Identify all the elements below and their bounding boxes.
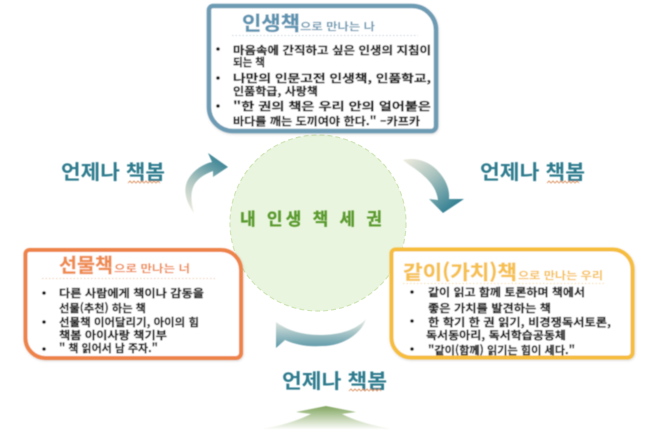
panel bullet list: 바다를 깨는 도끼여야 한다." –카프카	[233, 113, 420, 129]
panel heading: 으로 만나는 나	[300, 19, 375, 34]
panel bullet list: 되는 책	[233, 54, 265, 70]
panel bullet list: 한 학기 한 권 읽기, 비경쟁독서토론,	[428, 314, 611, 330]
panel frame	[209, 6, 436, 131]
panel bullet list: 나만의 인문고전 인생책, 인품학교,	[233, 70, 431, 86]
panel heading	[242, 7, 375, 36]
panel frame	[391, 249, 633, 358]
panel bullet list: 다른 사람에게 책이나 감동을	[59, 285, 204, 301]
label: 언제나 책봄 left: 언제나 책봄	[61, 156, 165, 185]
arrow: green upward	[262, 406, 392, 429]
panel bullet list: 같이 읽고 함께 토론하며 책에서	[428, 284, 585, 300]
panel bullet list: " 책 읽어서 남 주자."	[59, 340, 158, 356]
panel bullet list: 좋은 가치를 발견하는 책	[428, 300, 551, 316]
central circle	[230, 135, 406, 311]
arrow: left curved to top	[185, 153, 228, 213]
panel heading	[403, 256, 603, 285]
panel bullet list	[42, 285, 204, 356]
panel bullet list	[216, 42, 431, 129]
panel bullet list: 선물책 이어달리기, 아이의 힘	[59, 314, 199, 330]
panel bullet list: 책봄 아이사랑 책기부	[59, 327, 167, 343]
panel: 선물책	[26, 249, 241, 358]
panel: 같이(가치)책	[391, 249, 633, 358]
panel heading: 으로 만나는 너	[114, 261, 190, 276]
panel bullet list: "같이(함께) 읽기는 힘이 세다."	[428, 342, 575, 358]
panel bullet list: "한 권의 책은 우리 안의 얼어붙은	[233, 98, 431, 114]
panel heading: 같이(가치)책	[403, 256, 517, 285]
panel bullet list: 마음속에 간직하고 싶은 인생의 지침이	[233, 42, 431, 58]
panel bullet list	[410, 284, 611, 358]
arrow: right curved downward	[403, 159, 464, 213]
circle title: 내 인생 책 세 권	[240, 205, 382, 230]
label: 언제나 책봄 bottom: 언제나 책봄	[282, 365, 387, 394]
panel bullet list: 선물(추천) 하는 책	[59, 300, 146, 316]
panel bullet list: 독서동아리, 독서학습공동체	[426, 327, 566, 343]
arrow: bottom curved to left	[276, 319, 366, 348]
panel: 인생책	[209, 6, 436, 131]
panel heading	[59, 249, 190, 278]
panel bullet list: 인품학급, 사랑책	[233, 83, 318, 99]
panel heading: 선물책	[59, 249, 113, 278]
label: 언제나 책봄 right: 언제나 책봄	[480, 156, 585, 185]
panel frame	[26, 250, 241, 358]
panel heading: 인생책	[242, 7, 300, 36]
panel heading: 으로 만나는 우리	[518, 268, 603, 283]
